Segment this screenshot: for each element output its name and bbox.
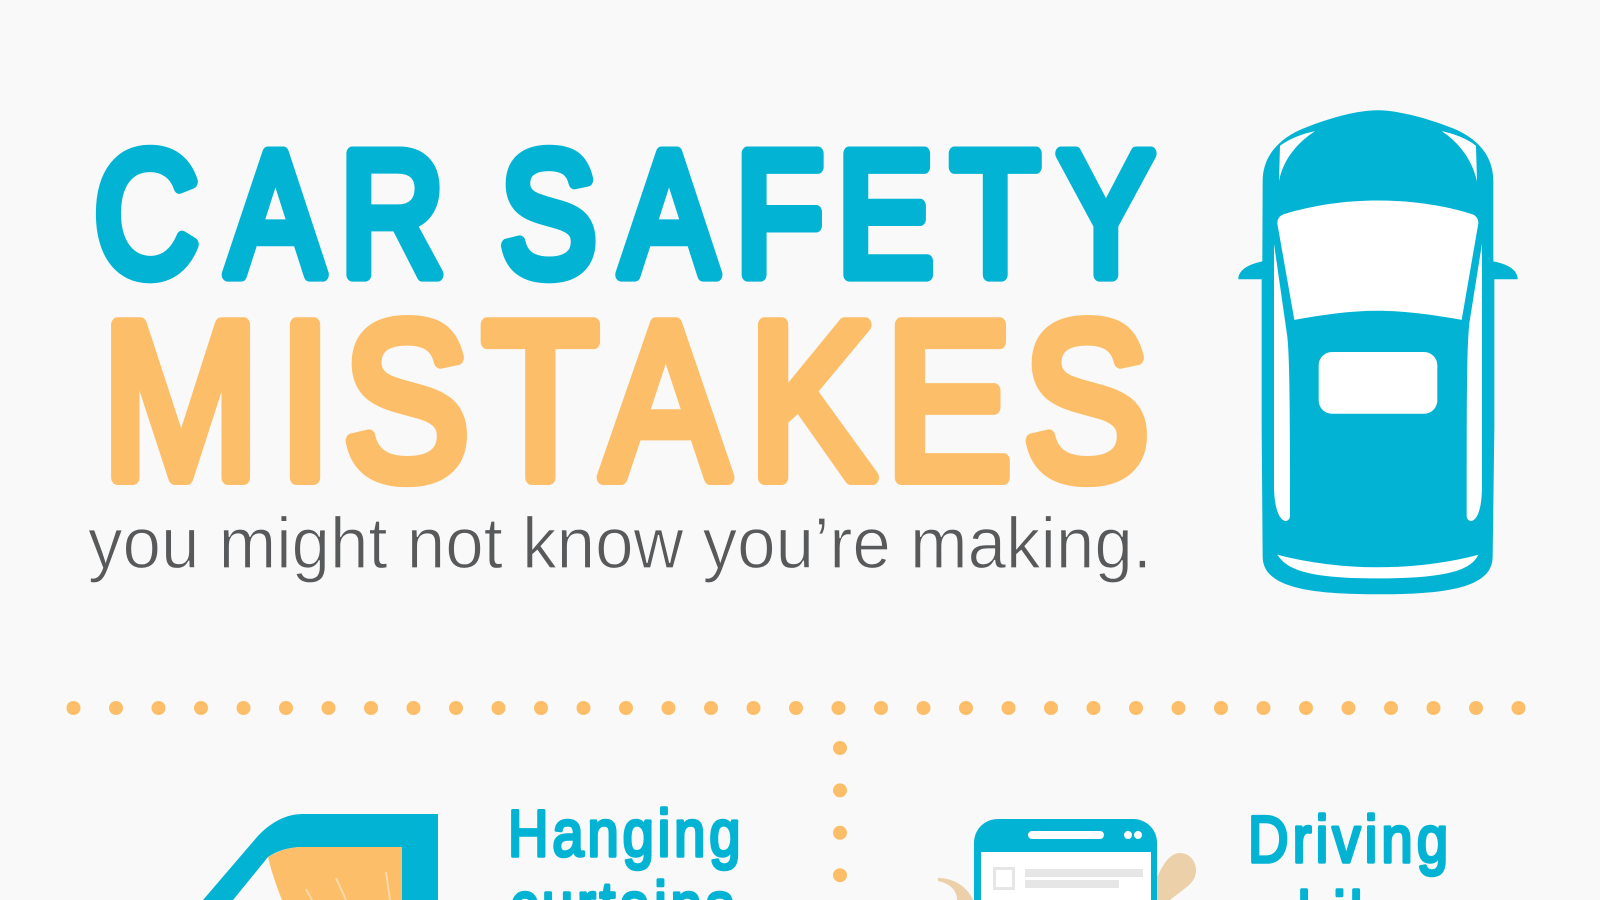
curtain bbox=[268, 847, 402, 900]
vertical dotted divider bbox=[833, 748, 847, 900]
right headlight bbox=[1442, 131, 1477, 181]
phone body bbox=[974, 819, 1157, 900]
window frame bbox=[203, 814, 438, 900]
horizontal dotted divider bbox=[74, 701, 1520, 715]
phone screen bbox=[981, 852, 1151, 900]
thumb bbox=[938, 878, 973, 900]
title: car safety: CAR SAFETY bbox=[94, 116, 1154, 313]
left side window bbox=[1274, 244, 1290, 521]
left headlight bbox=[1279, 131, 1315, 181]
rear bumper highlight bbox=[1277, 555, 1478, 578]
list checkbox bbox=[994, 868, 1014, 888]
title: mistakes: MISTAKES bbox=[102, 276, 1149, 525]
heading: driving while: Driving bbox=[1248, 803, 1452, 876]
speaker bbox=[1028, 831, 1104, 839]
icon: car window with curtain bbox=[203, 814, 438, 900]
right side window bbox=[1467, 244, 1482, 521]
rear window bbox=[1319, 352, 1437, 414]
icon: car seen from above bbox=[1238, 110, 1518, 594]
subtitle: you might not know you’re making. bbox=[88, 504, 1152, 584]
windshield bbox=[1277, 201, 1478, 320]
car body bbox=[1238, 110, 1518, 594]
finger bbox=[1157, 853, 1196, 900]
curtain folds bbox=[306, 872, 390, 900]
heading: hanging curtains: Hanging bbox=[508, 797, 744, 870]
list lines bbox=[1025, 869, 1143, 888]
camera dots bbox=[1124, 831, 1142, 839]
icon: hand holding a phone bbox=[938, 819, 1196, 900]
